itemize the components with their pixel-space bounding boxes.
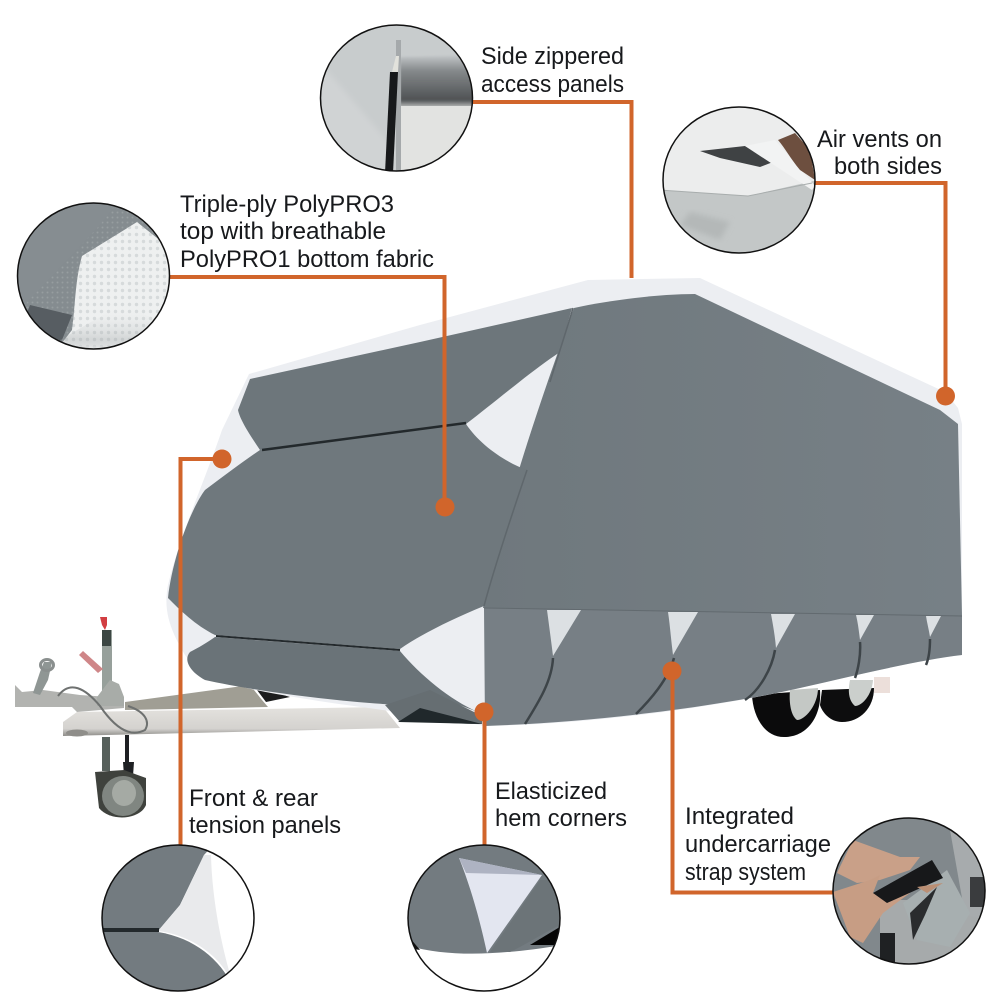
label: fabric: Triple-ply PolyPRO3 [180,191,394,218]
inset: hem corner [405,843,563,993]
label: undercarriage strap: strap system [685,859,806,886]
label: undercarriage strap: undercarriage [685,831,831,858]
label: undercarriage strap: Integrated [685,803,794,830]
label: tension panels [189,785,341,839]
lower drawbar beam [63,707,400,736]
cover white base silhouette [166,278,962,726]
inset: tension panel [100,843,258,995]
label: fabric [180,191,434,273]
label: hem corners [495,778,627,832]
upper drawbar arm [125,685,268,710]
label: side zippered access panels: Side zippered [481,43,624,70]
middle front gray panel [168,424,527,649]
front and side panel seam [484,308,573,606]
label: air vents: both sides [834,153,942,180]
cable [58,687,147,733]
lower front gray panel [187,637,478,712]
hem gather [385,690,482,724]
lower skirt panel [484,608,962,726]
undercarriage straps [525,639,930,724]
upper front gray panel [238,308,572,450]
trailer frame and jockey wheel [15,617,890,817]
label: side zippered access panels: access panels [481,71,624,98]
seam zippers [262,423,466,450]
label: fabric: PolyPRO1 bottom fabric [180,246,434,273]
coupling [15,685,124,712]
trailer cover [166,278,962,726]
jack post and handle [102,630,112,700]
inset: side zipper [318,23,476,173]
inset: air vent [660,105,818,255]
rear tires [752,677,890,737]
leader lines [170,102,946,892]
jockey wheel [95,735,146,817]
label: tension panels: Front & rear [189,785,318,812]
label: hem corners: Elasticized [495,778,607,805]
inset: fabric layers [15,200,173,352]
marker dots [212,386,955,722]
label: side zippered access panels [481,43,624,98]
label: undercarriage strap [685,803,831,886]
label: tension panels: tension panels [189,812,341,839]
side gray panel [483,294,962,616]
label: air vents [817,126,942,180]
skirt gussets [547,610,581,656]
inset: undercarriage strap [830,815,990,967]
label: air vents: Air vents on [817,126,942,153]
label: hem corners: hem corners [495,805,627,832]
label: fabric: top with breathable [180,218,386,245]
